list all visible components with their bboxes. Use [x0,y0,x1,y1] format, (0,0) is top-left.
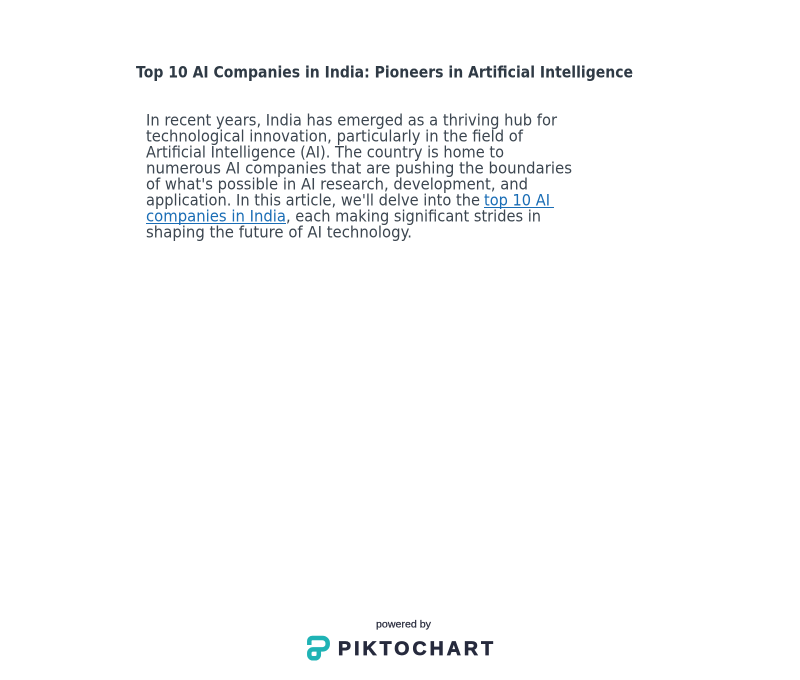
text block: introduction: of what's possible in AI research, development, and [146,174,528,194]
text block: introduction: top 10 AI [484,190,550,210]
logo wordmark: PIKTOCHART [338,638,493,660]
title: Top 10 AI Companies in India: Pioneers in Artificial Intelligence [136,62,633,82]
text block: introduction: numerous AI companies that are pushing the boundaries [146,158,572,178]
text block: introduction: shaping the future of AI technology. [146,222,412,242]
text block: introduction: companies in India [146,206,286,226]
text block: introduction: technological innovation, particularly in the field of [146,126,523,146]
text block: introduction: In recent years, India has emerged as a thriving hub for [146,110,557,130]
text block: introduction: application. In this article, we'll delve into the [146,190,480,210]
text block: introduction: Artificial Intelligence (AI). The country is home to [146,142,504,162]
icon: Piktochart logo mark [309,638,328,658]
text block: introduction [146,110,572,242]
powered by label: powered by [376,618,432,630]
text block: introduction: , each making significant strides in [286,206,541,226]
